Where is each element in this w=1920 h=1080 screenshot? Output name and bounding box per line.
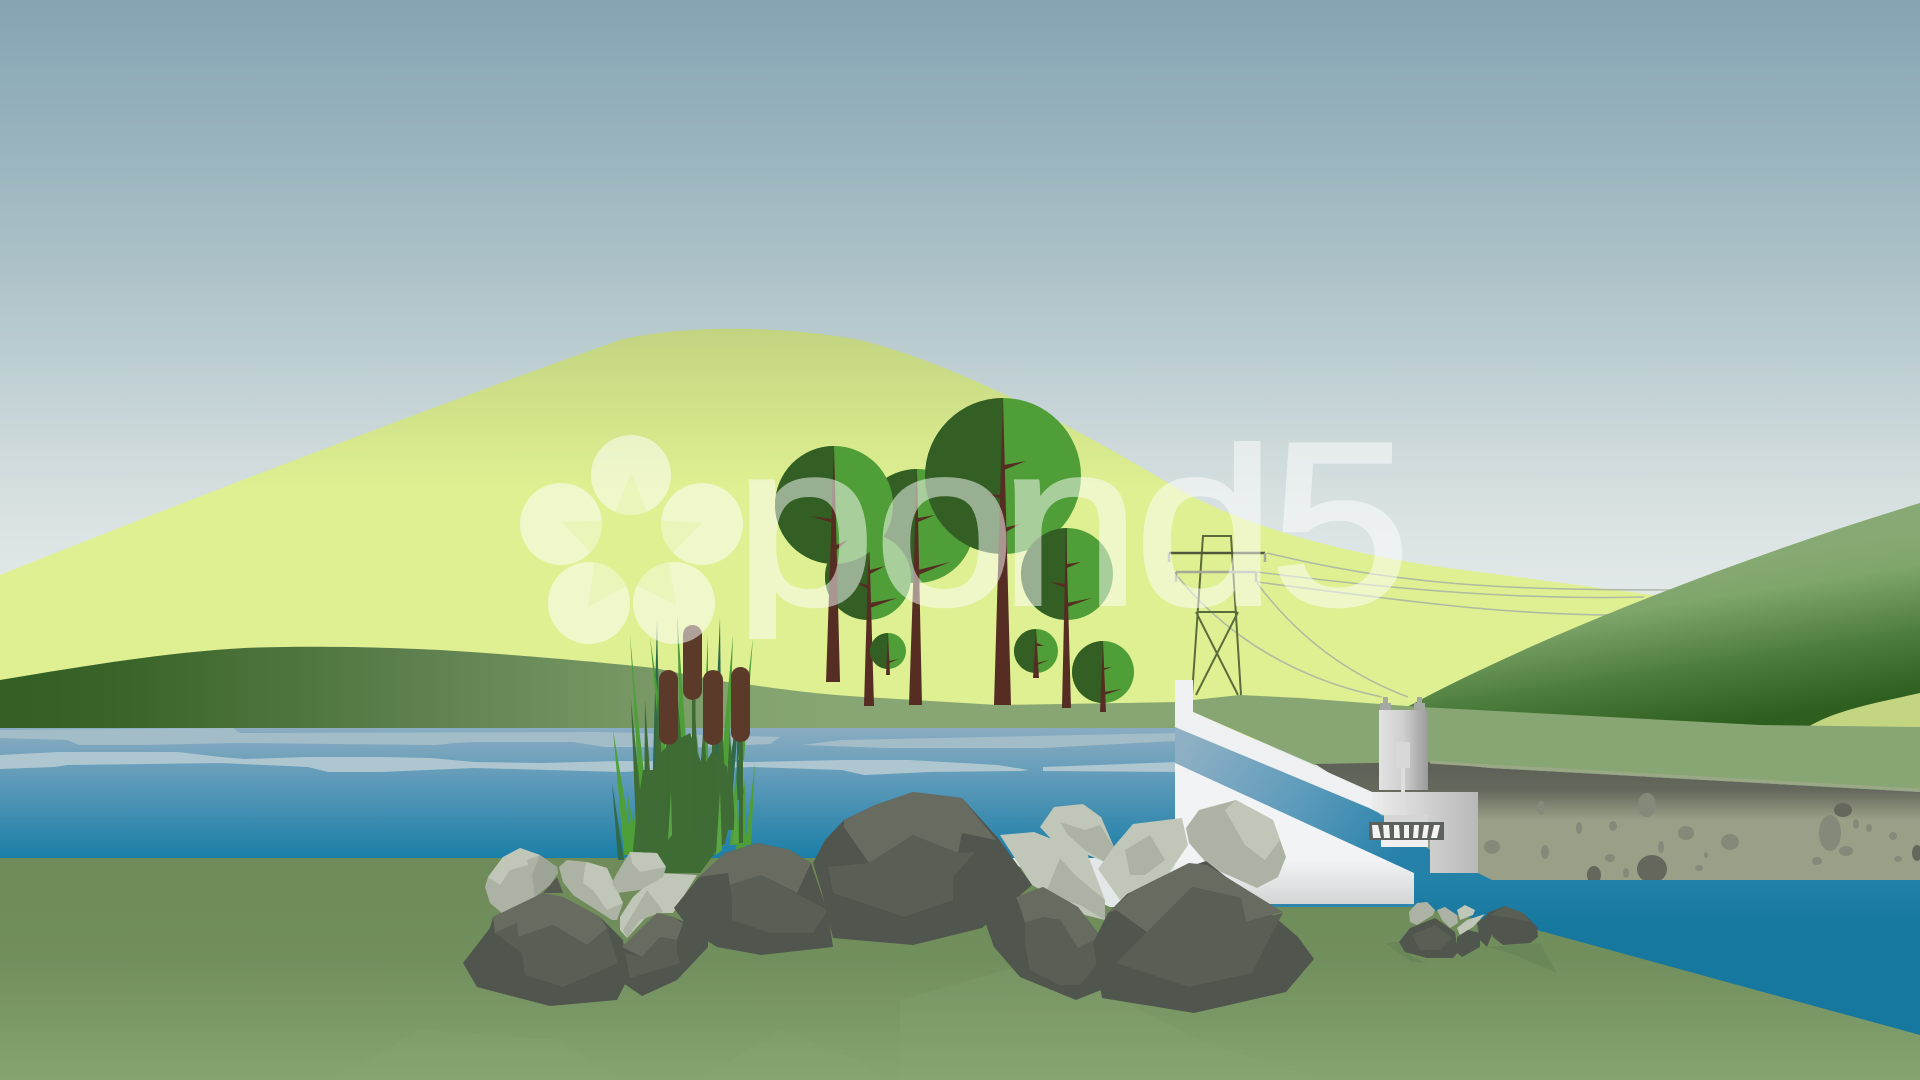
watermark text: pond5 (735, 395, 1411, 654)
dam white top wall (1175, 680, 1372, 808)
pond5 watermark (520, 435, 1402, 644)
light small rocks (1409, 902, 1485, 935)
dark rock behind (543, 877, 563, 893)
dark rock right-center (982, 887, 1101, 1000)
foreground ground (0, 858, 1920, 1080)
tree 5 (1021, 528, 1113, 708)
watermark flower logo (520, 435, 743, 644)
pale rock behind (620, 873, 697, 938)
pale rock behind (1000, 832, 1105, 920)
tree 6 (870, 633, 906, 675)
big dark right rock (1093, 861, 1314, 1013)
lake (0, 728, 1176, 858)
mid dark rock (674, 843, 833, 955)
tree 4 (925, 398, 1081, 705)
rock cluster right (813, 792, 1314, 1013)
small far-right hill (1808, 693, 1920, 735)
light rock 2 (559, 860, 623, 920)
back dark rocks (1477, 915, 1495, 947)
small light rock on top (612, 852, 666, 893)
cattail 1 (659, 670, 678, 745)
reed highlights (668, 790, 738, 855)
front dark rocks (1399, 918, 1458, 958)
right green bank (1193, 695, 1920, 792)
tree 3 (860, 469, 974, 705)
pylon (1169, 536, 1265, 695)
bright reed blades (613, 613, 755, 860)
big dark center rock (813, 792, 1032, 945)
rock shadows (1385, 942, 1557, 973)
ground reflections (330, 960, 1320, 1080)
light rock 1 (485, 848, 558, 914)
back reed blades (612, 617, 744, 860)
tree 7 (1014, 629, 1058, 678)
cattail 3 (703, 670, 723, 745)
tree 8 (1072, 641, 1134, 712)
power lines (1178, 553, 1675, 697)
dark reed mass (633, 733, 730, 873)
lower water channel (1414, 873, 1920, 1040)
tree 2 (825, 534, 911, 706)
dam lower white face (1175, 763, 1414, 905)
insulators (1380, 697, 1425, 710)
light rock right (1186, 800, 1286, 888)
tree group (775, 398, 1134, 712)
lake waves (0, 728, 1176, 775)
small rock group by dam (1385, 902, 1557, 973)
thin waterline under dam (1175, 904, 1415, 907)
cattail 2 (683, 625, 702, 700)
concrete retaining wall with stones (1315, 762, 1920, 885)
spillway channel water (1175, 725, 1430, 880)
light rock top (1040, 804, 1114, 862)
left dark hill (0, 647, 1180, 735)
dark rock 2 (622, 913, 708, 996)
dam upper wall and gate block (1175, 680, 1478, 873)
cattail 4 (731, 667, 750, 742)
dark upper blades (631, 690, 735, 830)
control tower (1379, 697, 1428, 818)
light rock middle (1098, 818, 1188, 900)
tree 1 (775, 446, 893, 682)
turbine (1369, 815, 1444, 847)
big yellow-green background hill (0, 329, 1660, 740)
right dark hill (1405, 503, 1920, 740)
dark rock 1 (463, 893, 627, 1006)
cattail stems (666, 700, 743, 843)
reeds and cattails (612, 613, 755, 873)
rock cluster left (463, 843, 833, 1006)
